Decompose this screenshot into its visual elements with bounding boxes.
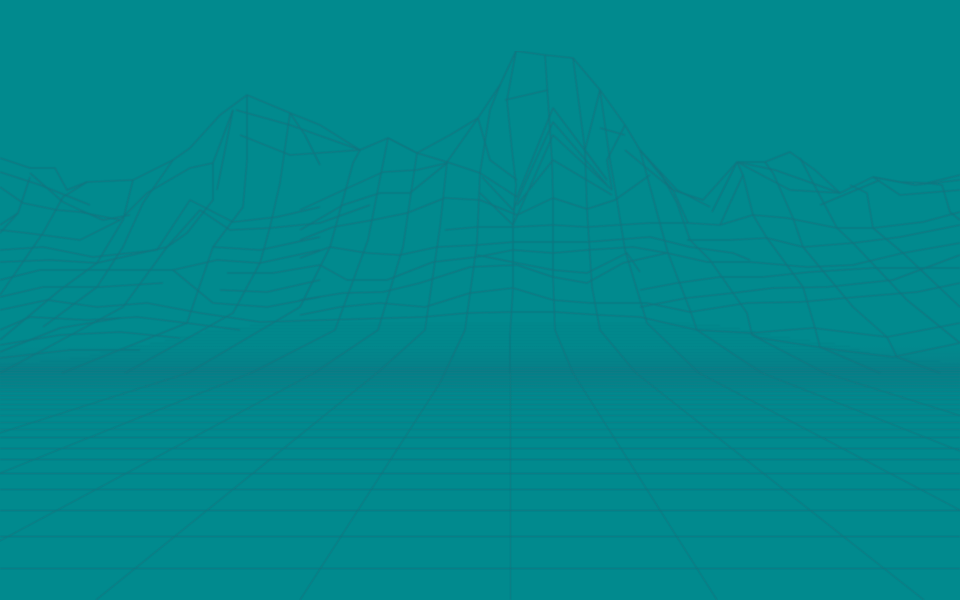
horizon band: [0, 345, 960, 395]
mountains: [0, 51, 960, 383]
central rows: [300, 163, 447, 210]
ground grid: [0, 322, 960, 600]
left columns: [125, 113, 290, 373]
right rows: [625, 150, 710, 223]
left rows: [0, 163, 213, 220]
skyline: [0, 51, 960, 200]
center columns: [507, 51, 516, 373]
right columns: [640, 150, 762, 373]
central chevrons: [388, 90, 625, 225]
